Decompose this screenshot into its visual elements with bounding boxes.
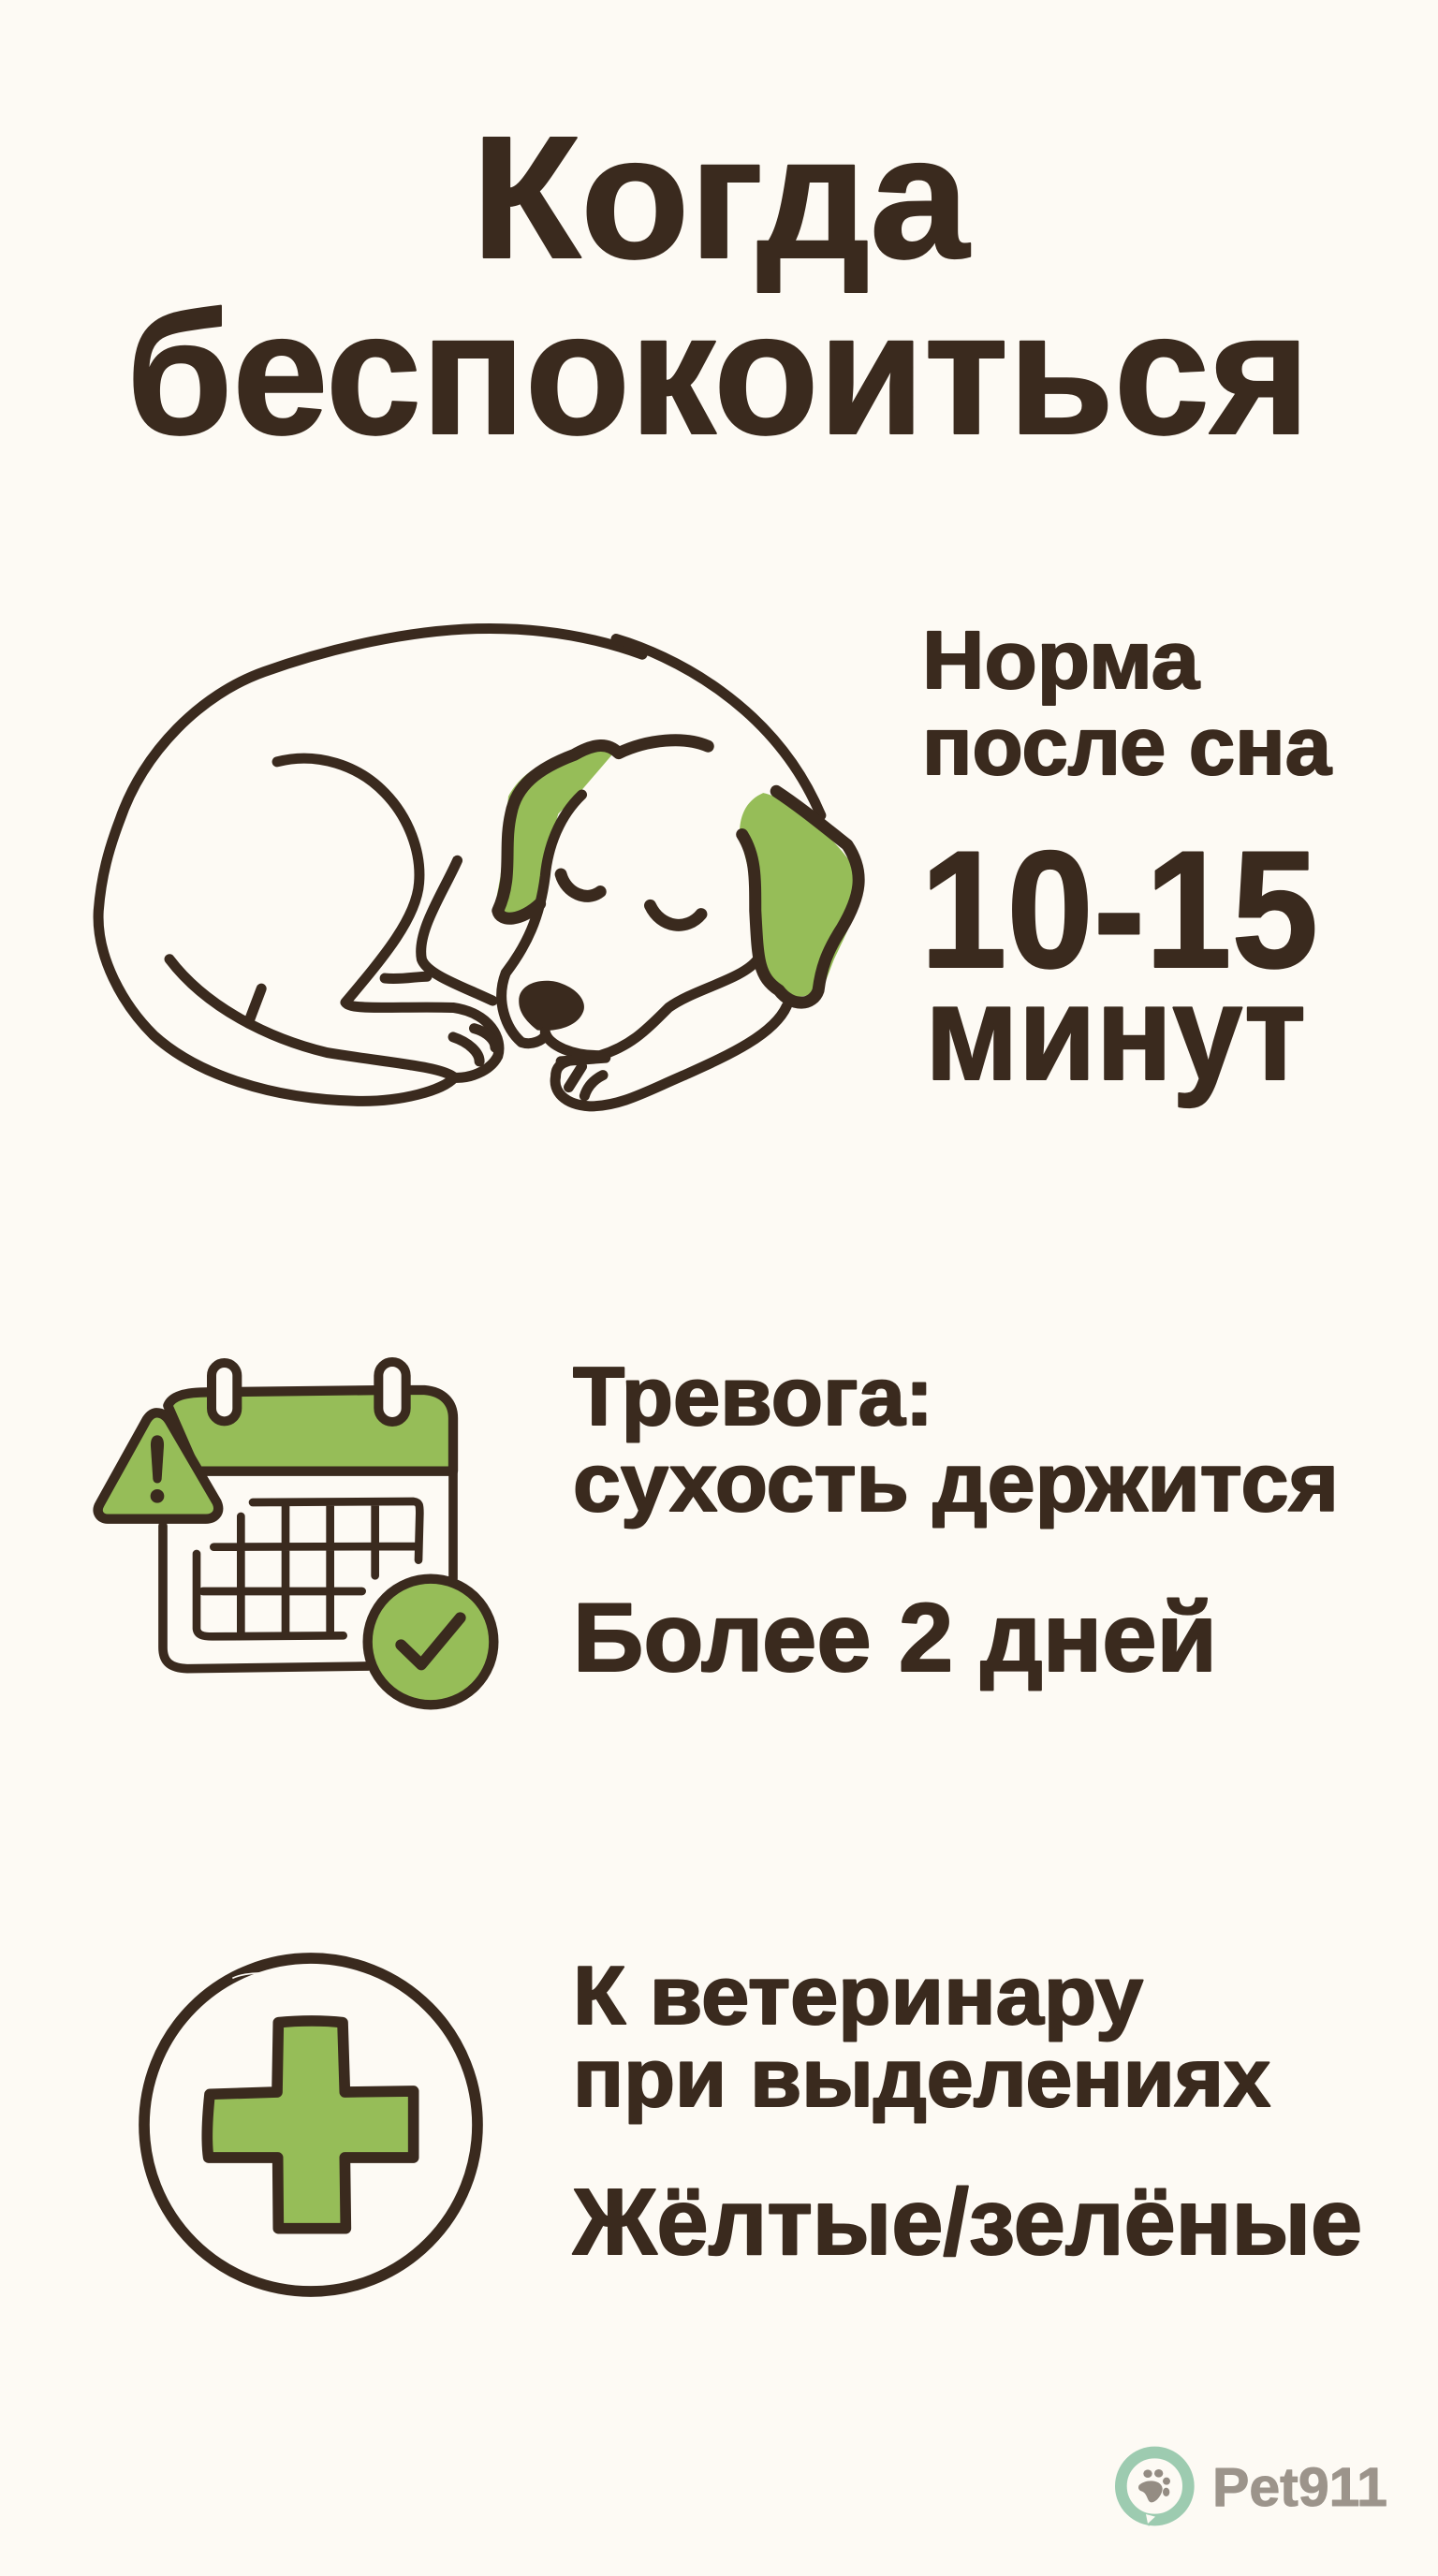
text: alarm heading [573, 1350, 1339, 1529]
text: alarm heading: Тревога: [573, 1350, 933, 1442]
right ear fill [740, 793, 858, 997]
text: vet heading: К ветеринару [573, 1949, 1143, 2042]
left ear fill [494, 746, 613, 921]
icon: calendar with warning and check [98, 1362, 493, 1705]
calendar grid [197, 1501, 419, 1636]
text: norm value [920, 816, 1318, 1108]
icon: sleeping dog [98, 628, 858, 1106]
logo text: Pet911 [1212, 2457, 1387, 2518]
text: norm heading: после сна [922, 701, 1332, 792]
text: vet heading [573, 1949, 1270, 2124]
text: norm value: минут [925, 957, 1306, 1108]
text: norm value: 10-15 [920, 816, 1318, 1003]
title: Когда [472, 101, 971, 295]
text: vet value: Жёлтые/зелёные [572, 2170, 1362, 2275]
text: vet heading: при выделениях [573, 2031, 1270, 2124]
logo: Pet911 [1121, 2452, 1387, 2526]
check badge [368, 1579, 493, 1705]
text: norm heading: Норма [922, 615, 1200, 706]
icon: medical cross in circle [144, 1958, 477, 2291]
text: alarm value: Более 2 дней [573, 1584, 1217, 1692]
icon: paw in speech ring [1121, 2452, 1188, 2526]
panel: vet [144, 1949, 1362, 2291]
panel: normal after sleep [98, 615, 1332, 1108]
title: беспокоиться [126, 277, 1310, 471]
text: norm heading [922, 615, 1332, 792]
calendar body [163, 1472, 453, 1669]
text: alarm heading: сухость держится [573, 1436, 1339, 1529]
title [126, 101, 1310, 471]
nose [519, 981, 584, 1031]
warning triangle [98, 1412, 218, 1519]
calendar rings [212, 1362, 406, 1422]
calendar header [168, 1390, 453, 1471]
panel: alarm dryness [98, 1350, 1339, 1705]
